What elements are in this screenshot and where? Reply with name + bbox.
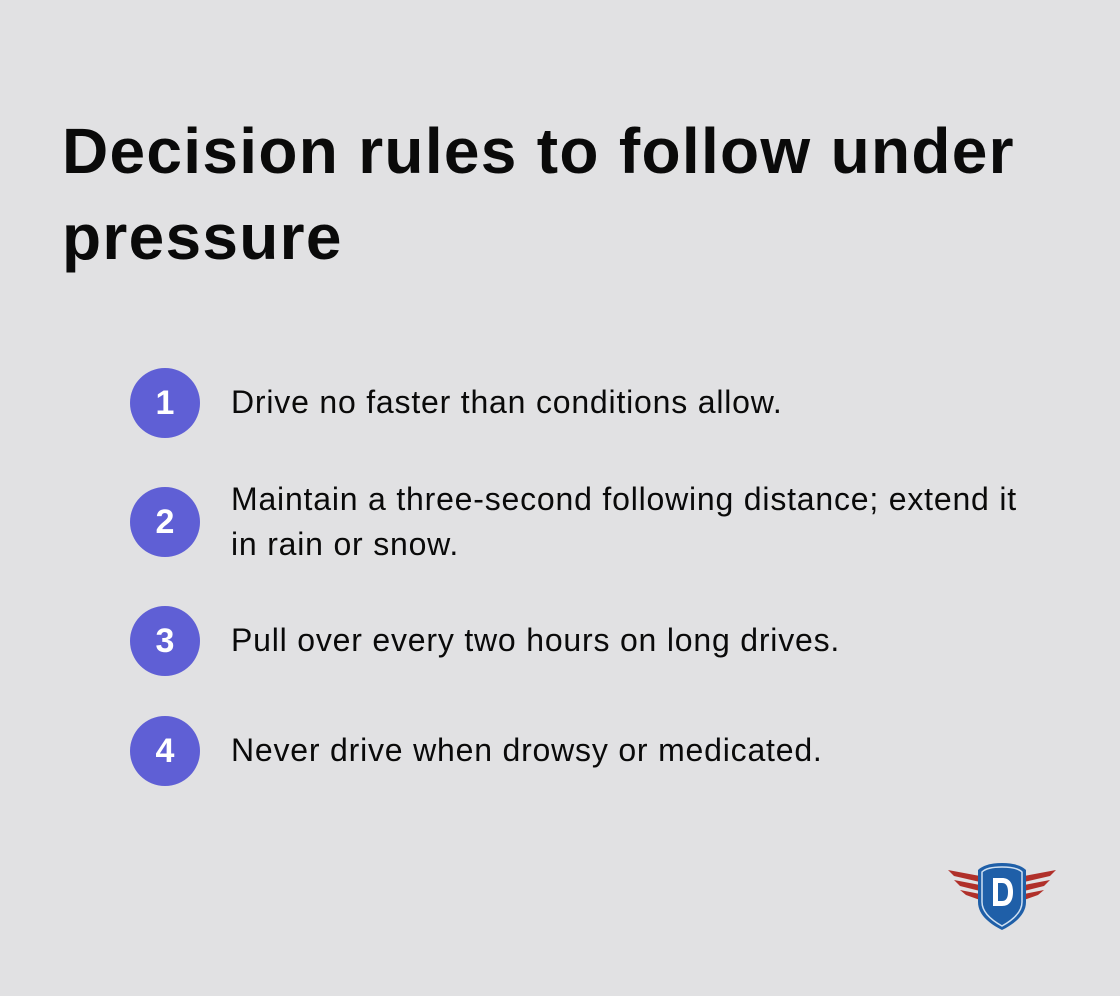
text 2: in rain or snow.: [231, 526, 459, 562]
number badge 2: 2: [156, 503, 174, 541]
number badge 3: 3: [156, 622, 174, 660]
number badge 4: 4: [156, 732, 174, 770]
number badge 2: [130, 487, 200, 557]
number badge 3: [130, 606, 200, 676]
text 4: Never drive when drowsy or medicated.: [231, 732, 823, 768]
item 2: [130, 481, 1017, 562]
title: pressure: [62, 201, 343, 273]
text 2: Maintain a three-second following distance; extend it: [231, 481, 1017, 517]
icon: shield logo: [948, 863, 1056, 930]
item 1: [130, 368, 783, 438]
title: [62, 115, 1015, 273]
title: Decision rules to follow under: [62, 115, 1015, 187]
number badge 4: [130, 716, 200, 786]
item 4: [130, 716, 823, 786]
number badge 1: [130, 368, 200, 438]
text 1: Drive no faster than conditions allow.: [231, 384, 783, 420]
text 3: Pull over every two hours on long drives.: [231, 622, 840, 658]
text 2: [231, 481, 1017, 562]
number badge 1: 1: [156, 384, 174, 422]
item 3: [130, 606, 840, 676]
